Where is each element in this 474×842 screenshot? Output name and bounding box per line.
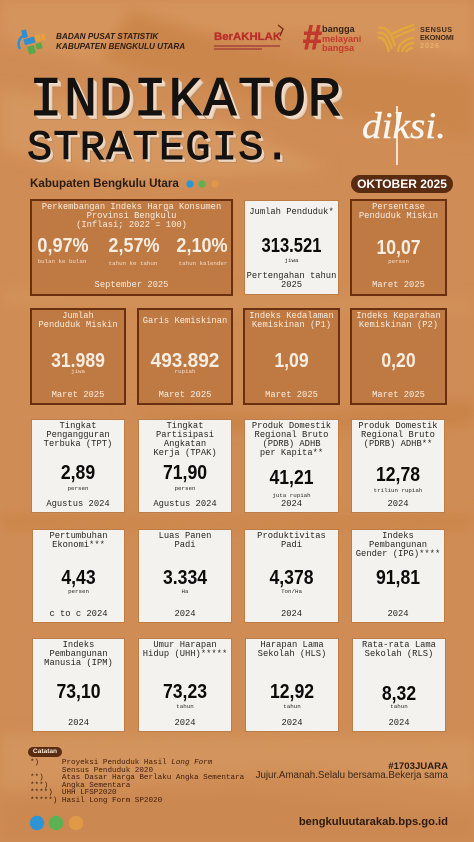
panel: TPAK: Kerja (TPAK) [153,448,217,458]
panel: IPM: 2024 [68,718,89,728]
panel: RLS [352,638,446,732]
panel: RLS: tahun [390,703,408,710]
notes: *) Proyeksi Penduduk Hasil Long Form Sensus Penduduk 2020 **) Atas Dasar Harga Berlaku Angka Sementara ***) Angka Sementara ****) UHH LFSP2020 *****) Hasil Long Form SP2020 [30,759,244,804]
panel: inflasi: tahun ke tahun [109,260,157,267]
panel: HLS: tahun [283,703,301,710]
panel: luas panen padi: Luas Panen [159,531,211,541]
panel: IPM: Pembangunan [49,649,108,659]
panel: TPAK: Agustus 2024 [153,499,217,509]
hashtag: #1703JUARA [388,761,448,772]
panel: jumlah penduduk miskin: Jumlah [62,311,94,321]
logo: bangga melayani bangsa: melayani [322,34,361,44]
panel: TPT: Tingkat [60,421,96,431]
panel: IPM: 73,10 [56,681,101,703]
panel: inflasi: (Inflasi; 2022 = 100) [76,220,187,230]
panel: IPM: Indeks [63,640,94,650]
panel: indeks kedalaman kemiskinan: Maret 2025 [265,390,318,400]
panel: UHH: tahun [176,703,194,710]
color dots [186,180,218,188]
notes label [28,747,62,757]
logo: BerAKHLAK [214,24,284,50]
panel: UHH: 2024 [174,718,196,728]
panel: inflasi: 2,57% [108,234,160,257]
panel: inflasi: 0,97% [37,234,89,257]
panel: indeks kedalaman kemiskinan [243,308,340,405]
panel: luas panen padi: 3.334 [163,567,207,589]
panel: PDRB per kapita: 2024 [281,499,302,509]
panel: TPT: persen [68,485,88,492]
date badge: OKTOBER 2025 [357,177,447,191]
panel: PDRB: 12,78 [376,464,420,486]
logo: BerAKHLAK: BerAKHLAK [214,31,281,43]
panel: UHH: 73,23 [163,681,207,703]
panel: inflasi [30,199,233,296]
panel: PDRB: triliun rupiah [374,487,422,494]
panel: HLS: Harapan Lama [260,640,324,650]
panel: indeks keparahan kemiskinan [350,308,447,405]
panel: UHH: Umur Harapan [153,640,217,650]
panel: HLS: 12,92 [270,681,314,703]
logo: bangga melayani bangsa: bangga [322,24,355,34]
panel: TPAK: Partisipasi [156,430,214,440]
panel: luas panen padi: Ha [182,588,188,595]
panel: IPM [32,638,125,732]
panel: produktivitas padi: Padi [281,540,302,550]
panel: produktivitas padi: 2024 [281,609,302,619]
panel: TPT: Agustus 2024 [46,499,110,509]
panel: jumlah penduduk miskin: 31.989 [51,350,105,372]
panel: jumlah penduduk miskin: jiwa [71,368,85,375]
panel: indeks keparahan kemiskinan: 0,20 [381,350,416,372]
panel: persentase penduduk miskin: Penduduk Miskin [359,211,438,221]
agency name: KABUPATEN BENGKULU UTARA [56,42,185,51]
panel: IPG: 2024 [387,609,409,619]
panel: jumlah penduduk: Jumlah Penduduk* [249,206,334,216]
panel: PDRB: 2024 [387,499,409,509]
panel: inflasi: Provinsi Bengkulu [87,211,176,221]
panel: pertumbuhan ekonomi: persen [68,588,89,595]
panel: pertumbuhan ekonomi: Pertumbuhan [49,531,108,541]
panel: indeks keparahan kemiskinan: Maret 2025 [372,390,425,400]
panel: TPT: 2,89 [61,462,95,484]
panel: TPT: Pengangguran [46,430,110,440]
panel: luas panen padi: Padi [174,540,196,550]
date badge [351,175,453,193]
panel: HLS: 2024 [281,718,303,728]
panel: HLS [245,638,339,732]
panel: jumlah penduduk: jiwa [285,257,298,264]
panel: PDRB [351,419,445,513]
panel: IPM: Manusia (IPM) [44,658,113,668]
panel: persentase penduduk miskin: 10,07 [376,237,421,259]
panel: pertumbuhan ekonomi: Ekonomi*** [52,540,105,550]
panel: jumlah penduduk miskin [30,308,126,405]
panel: IPG [351,529,445,623]
logo: bangga melayani bangsa: # [303,19,322,57]
title: INDIKATOR [29,68,342,132]
panel: indeks keparahan kemiskinan: Kemiskinan (P2) [359,320,438,330]
agency name: BADAN PUSAT STATISTIK [56,32,158,41]
notes label: Catatan [33,748,57,755]
panel: pertumbuhan ekonomi [32,529,125,623]
logo: Sensus Ekonomi 2026 [378,24,454,52]
panel: HLS: Sekolah (HLS) [258,649,326,659]
logo: Sensus Ekonomi 2026: 2026 [420,41,440,50]
panel: PDRB per kapita: juta rupiah [272,492,311,499]
panel: indeks kedalaman kemiskinan: 1,09 [274,350,309,372]
panel: RLS: 2024 [388,718,410,728]
panel: garis kemiskinan [137,308,233,405]
panel: jumlah penduduk: 2025 [281,280,302,290]
panel: TPAK [138,419,232,513]
panel: jumlah penduduk miskin: Maret 2025 [52,390,104,400]
panel: produktivitas padi [244,529,339,623]
panel: RLS: Rata-rata Lama [362,640,436,650]
logo: BPS [17,29,46,55]
logo: Sensus Ekonomi 2026: EKONOMI [420,33,454,42]
panel: IPG: 91,81 [376,567,420,589]
footer dots [30,816,83,830]
panel: indeks kedalaman kemiskinan: Kemiskinan (P1) [252,320,331,330]
panel: luas panen padi [138,529,232,623]
panel: IPG: Gender (IPG)**** [356,549,440,559]
panel: garis kemiskinan: 493.892 [151,350,219,372]
panel: PDRB per kapita: (PDRB) ADHB [262,439,321,449]
panel: inflasi: Perkembangan Indeks Harga Konsumen [42,202,221,212]
logo: bangga melayani bangsa [303,19,361,57]
panel: garis kemiskinan: rupiah [175,368,195,375]
script label: diksi: diksi. [362,106,446,147]
panel: persentase penduduk miskin [350,199,447,296]
panel: produktivitas padi: Produktivitas [257,531,326,541]
panel: TPT: Terbuka (TPT) [44,439,112,449]
panel: RLS: 8,32 [382,683,416,705]
website: bengkuluutarakab.bps.go.id [299,816,448,828]
panel: IPG: Indeks [382,531,414,541]
panel: PDRB per kapita: 41,21 [269,467,314,489]
panel: PDRB: Regional Bruto [361,430,435,440]
panel: garis kemiskinan: Garis Kemiskinan [143,316,227,326]
panel: indeks kedalaman kemiskinan: Indeks Kedalaman [249,311,334,321]
panel: jumlah penduduk: 313.521 [261,235,321,257]
panel: IPG: Pembangunan [369,540,427,550]
panel: TPAK: persen [175,485,195,492]
panel: TPAK: Tingkat [167,421,203,431]
agency name [56,32,185,51]
region name: Kabupaten Bengkulu Utara [30,176,179,190]
values tagline: Jujur.Amanah.Selalu bersama.Bekerja sama [256,770,448,781]
panel: inflasi: bulan ke bulan [38,258,86,265]
panel: inflasi: tahun kalender [179,260,227,267]
panel: TPAK: 71,90 [163,462,207,484]
panel: jumlah penduduk: Pertengahan tahun [247,270,336,280]
panel: UHH [138,638,232,732]
panel: indeks keparahan kemiskinan: Indeks Keparahan [356,311,441,321]
panel: PDRB per kapita: Regional Bruto [255,430,328,440]
script label: diksi [362,106,446,165]
logo: Sensus Ekonomi 2026: SENSUS [420,24,453,34]
subtitle: STRATEGIS. [27,124,291,172]
panel: persentase penduduk miskin: Maret 2025 [372,280,425,290]
panel: pertumbuhan ekonomi: 4,43 [61,567,96,589]
logo: bangga melayani bangsa: bangsa [322,43,354,53]
panel: produktivitas padi: 4,378 [269,567,314,589]
panel: produktivitas padi: Ton/Ha [281,588,302,595]
panel: TPT [31,419,125,513]
panel: persentase penduduk miskin: persen [388,258,409,265]
panel: PDRB: Produk Domestik [358,421,438,431]
panel: PDRB per kapita [244,419,339,513]
panel: inflasi: September 2025 [95,280,168,290]
panel: pertumbuhan ekonomi: c to c 2024 [49,609,108,619]
panel: jumlah penduduk [244,200,339,295]
panel: garis kemiskinan: Maret 2025 [159,390,211,400]
panel: PDRB: (PDRB) ADHB** [364,439,432,449]
panel: PDRB per kapita: Produk Domestik [252,421,331,431]
panel: UHH: Hidup (UHH)***** [143,649,227,659]
panel: persentase penduduk miskin: Persentase [372,202,425,212]
panel: RLS: Sekolah (RLS) [365,649,433,659]
panel: inflasi: 2,10% [176,234,228,257]
panel: PDRB per kapita: per Kapita** [260,448,323,458]
panel: luas panen padi: 2024 [174,609,196,619]
panel: TPAK: Angkatan [164,439,206,449]
panel: jumlah penduduk miskin: Penduduk Miskin [38,320,118,330]
